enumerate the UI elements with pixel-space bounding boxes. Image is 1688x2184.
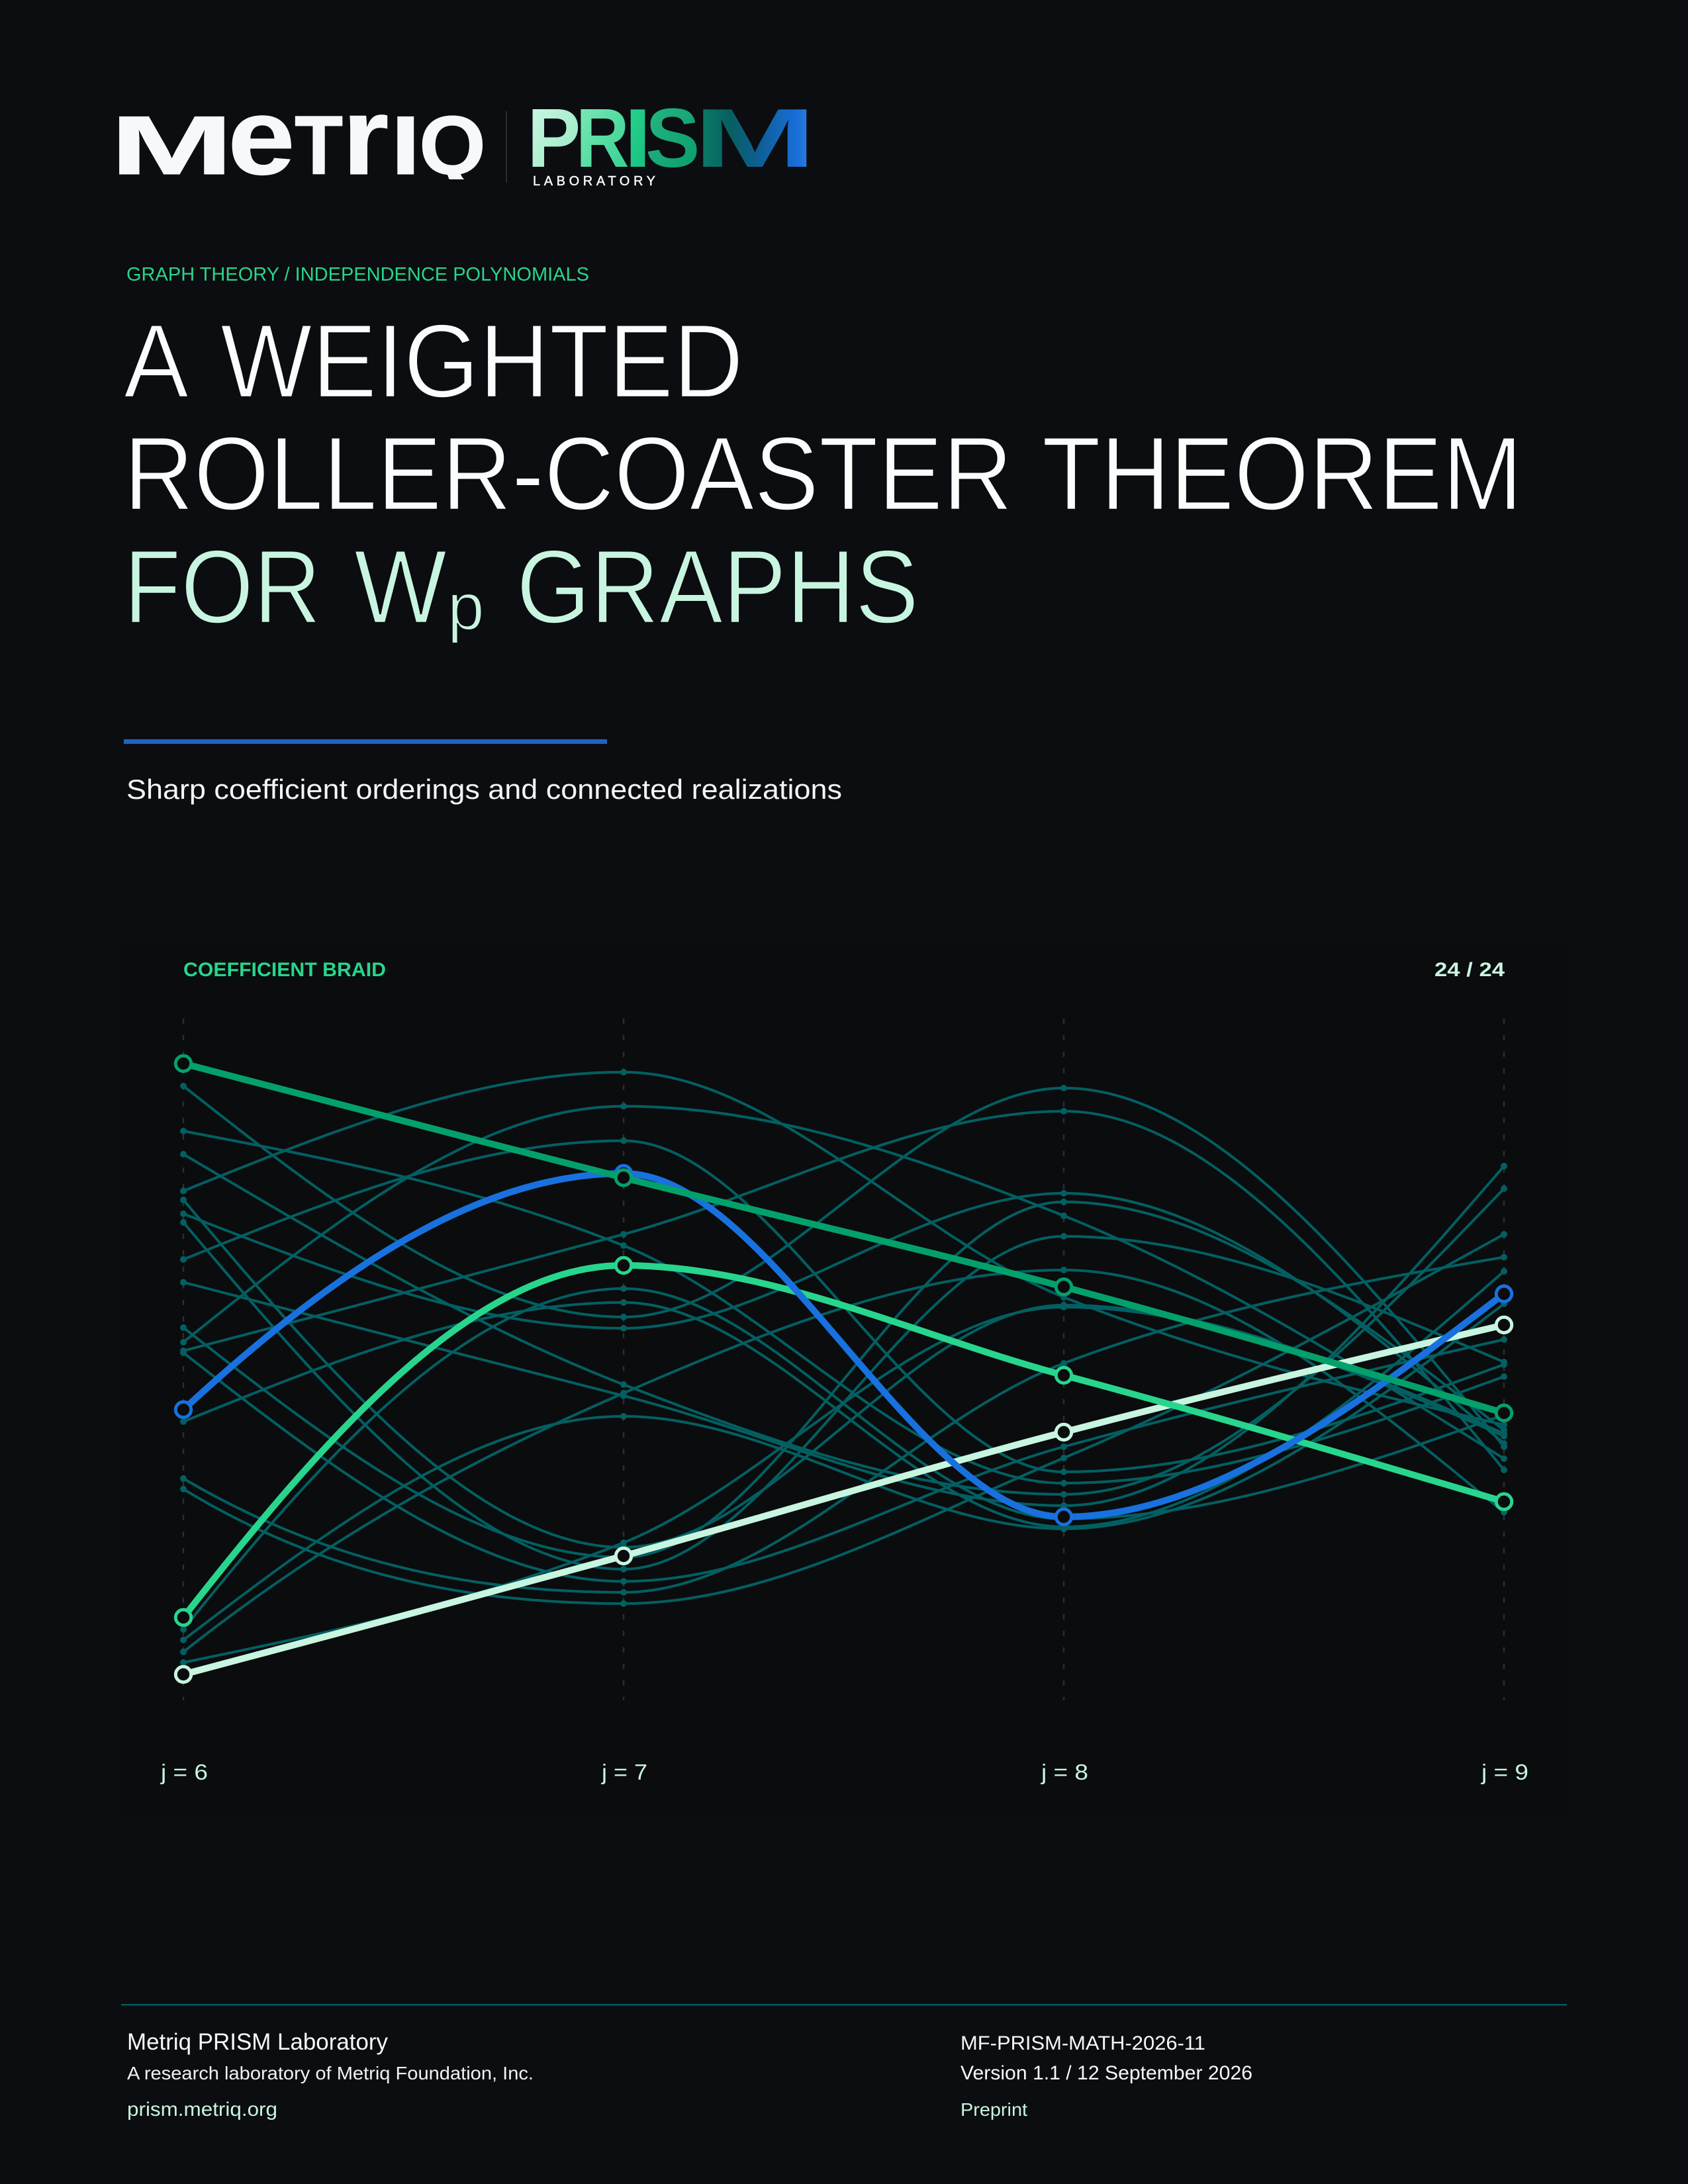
footer right: document metadata: MF-PRISM-MATH-2026-11 <box>961 2032 1205 2054</box>
axis labels: j = 8 <box>1041 1760 1088 1784</box>
title line 3 <box>124 529 919 645</box>
title line 2 <box>124 416 1523 532</box>
title <box>124 303 1523 645</box>
title line 3: FOR <box>124 529 321 645</box>
braid node dots <box>180 1069 1507 1666</box>
panel counter: 24 / 24 <box>1434 959 1505 981</box>
axis labels <box>160 1760 1528 1784</box>
title line 1: A <box>124 303 189 420</box>
logo: PRISM wordmark: S <box>645 92 700 185</box>
logo divider <box>506 111 507 183</box>
footer left: organization: A research laboratory of Metriq Foundation, Inc. <box>127 2063 534 2083</box>
logo: Metriq wordmark: e <box>228 76 295 197</box>
axis labels: j = 6 <box>160 1760 208 1784</box>
title line 3: p <box>447 570 485 644</box>
logo: Metriq wordmark: T <box>295 99 343 193</box>
background braid curves <box>183 1072 1504 1662</box>
poster <box>119 109 1567 2120</box>
footer <box>121 2004 1567 2120</box>
footer left: organization: Metriq PRISM Laboratory <box>127 2029 388 2055</box>
logo: Metriq wordmark: Q <box>419 99 486 193</box>
footer right: document metadata: Preprint <box>961 2099 1027 2120</box>
title line 2: THEOREM <box>1042 416 1523 532</box>
footer left: organization: prism.metriq.org <box>127 2099 277 2120</box>
accent rule <box>124 739 607 744</box>
title line 2: ROLLER-COASTER <box>124 416 1013 532</box>
logo: Metriq wordmark: M <box>110 99 234 192</box>
title line 1: WEIGHTED <box>220 303 743 420</box>
axis labels: j = 9 <box>1481 1760 1528 1784</box>
logo: Metriq wordmark <box>119 114 483 179</box>
logo: PRISM wordmark <box>527 92 816 185</box>
logo: Metriq wordmark: r <box>342 75 389 197</box>
panel background <box>122 944 1567 1815</box>
highlight: bright green series <box>175 1257 1512 1625</box>
title line 3: W <box>354 529 447 645</box>
logo: PRISM wordmark: P <box>527 92 581 185</box>
footer right: document metadata <box>961 2032 1252 2120</box>
logo: PRISM wordmark: M <box>693 92 816 185</box>
footer left: organization <box>127 2029 534 2120</box>
highlight: dark green series <box>175 1056 1512 1421</box>
panel: coefficient braid <box>122 944 1567 1815</box>
axis labels: j = 7 <box>601 1760 647 1784</box>
logo lockup <box>119 109 806 185</box>
logo: Laboratory tag: LABORATORY <box>533 174 655 189</box>
logo: PRISM wordmark: I <box>624 92 651 185</box>
logo: Metriq wordmark: I <box>391 99 421 192</box>
subtitle: Sharp coefficient orderings and connected realizations <box>126 774 842 805</box>
eyebrow: GRAPH THEORY / INDEPENDENCE POLYNOMIALS <box>126 264 589 285</box>
title line 3: GRAPHS <box>516 529 919 645</box>
logo: PRISM wordmark: R <box>576 92 630 185</box>
footer right: document metadata: Version 1.1 / 12 September 2026 <box>961 2062 1252 2084</box>
highlight: blue series <box>175 1165 1512 1525</box>
braid chart <box>175 1056 1512 1682</box>
panel heading: COEFFICIENT BRAID <box>183 959 386 981</box>
highlight: pale mint series <box>175 1317 1512 1682</box>
